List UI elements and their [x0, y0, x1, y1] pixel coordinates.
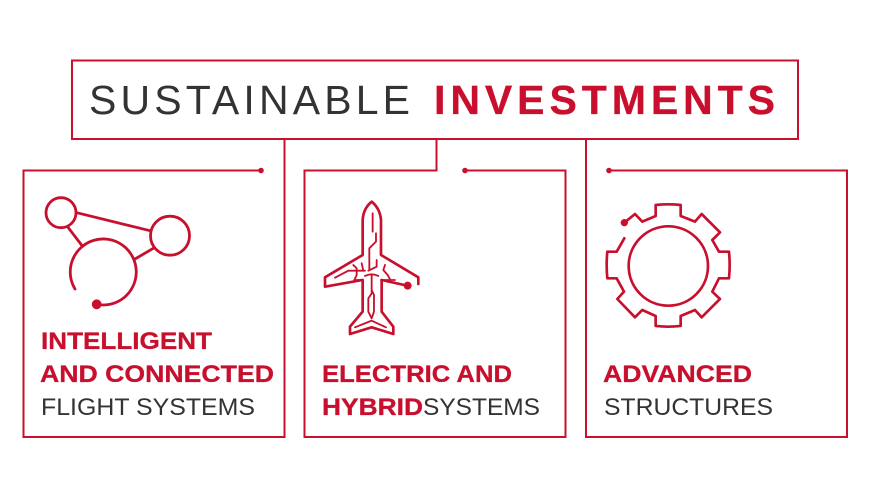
panel: advanced structures — [586, 139, 847, 437]
panel: electric and hybrid systems — [304, 139, 566, 437]
panel: intelligent and connected flight systems — [24, 139, 284, 437]
label: electric and hybrid systems — [322, 361, 540, 421]
label: intelligent and connected flight systems: FLIGHT SYSTEMS — [41, 394, 255, 421]
title: investments: INVESTMENTS — [434, 77, 775, 123]
icon: connected network — [46, 198, 190, 308]
label: intelligent and connected flight systems — [40, 328, 274, 421]
title: sustainable: SUSTAINABLE — [89, 77, 410, 123]
icon: circuit airplane — [325, 202, 418, 334]
label: advanced structures — [603, 361, 773, 421]
label: advanced structures: STRUCTURES — [604, 394, 773, 421]
icon: gear — [607, 204, 730, 327]
label: electric and hybrid systems: ELECTRIC AND — [322, 361, 512, 388]
title box — [72, 60, 798, 139]
label: intelligent and connected flight systems: INTELLIGENT — [41, 328, 212, 355]
label: intelligent and connected flight systems: AND CONNECTED — [40, 361, 274, 388]
label: electric and hybrid systems: HYBRID — [322, 394, 423, 421]
label: electric and hybrid systems: SYSTEMS — [423, 394, 540, 421]
label: advanced structures: ADVANCED — [603, 361, 752, 388]
